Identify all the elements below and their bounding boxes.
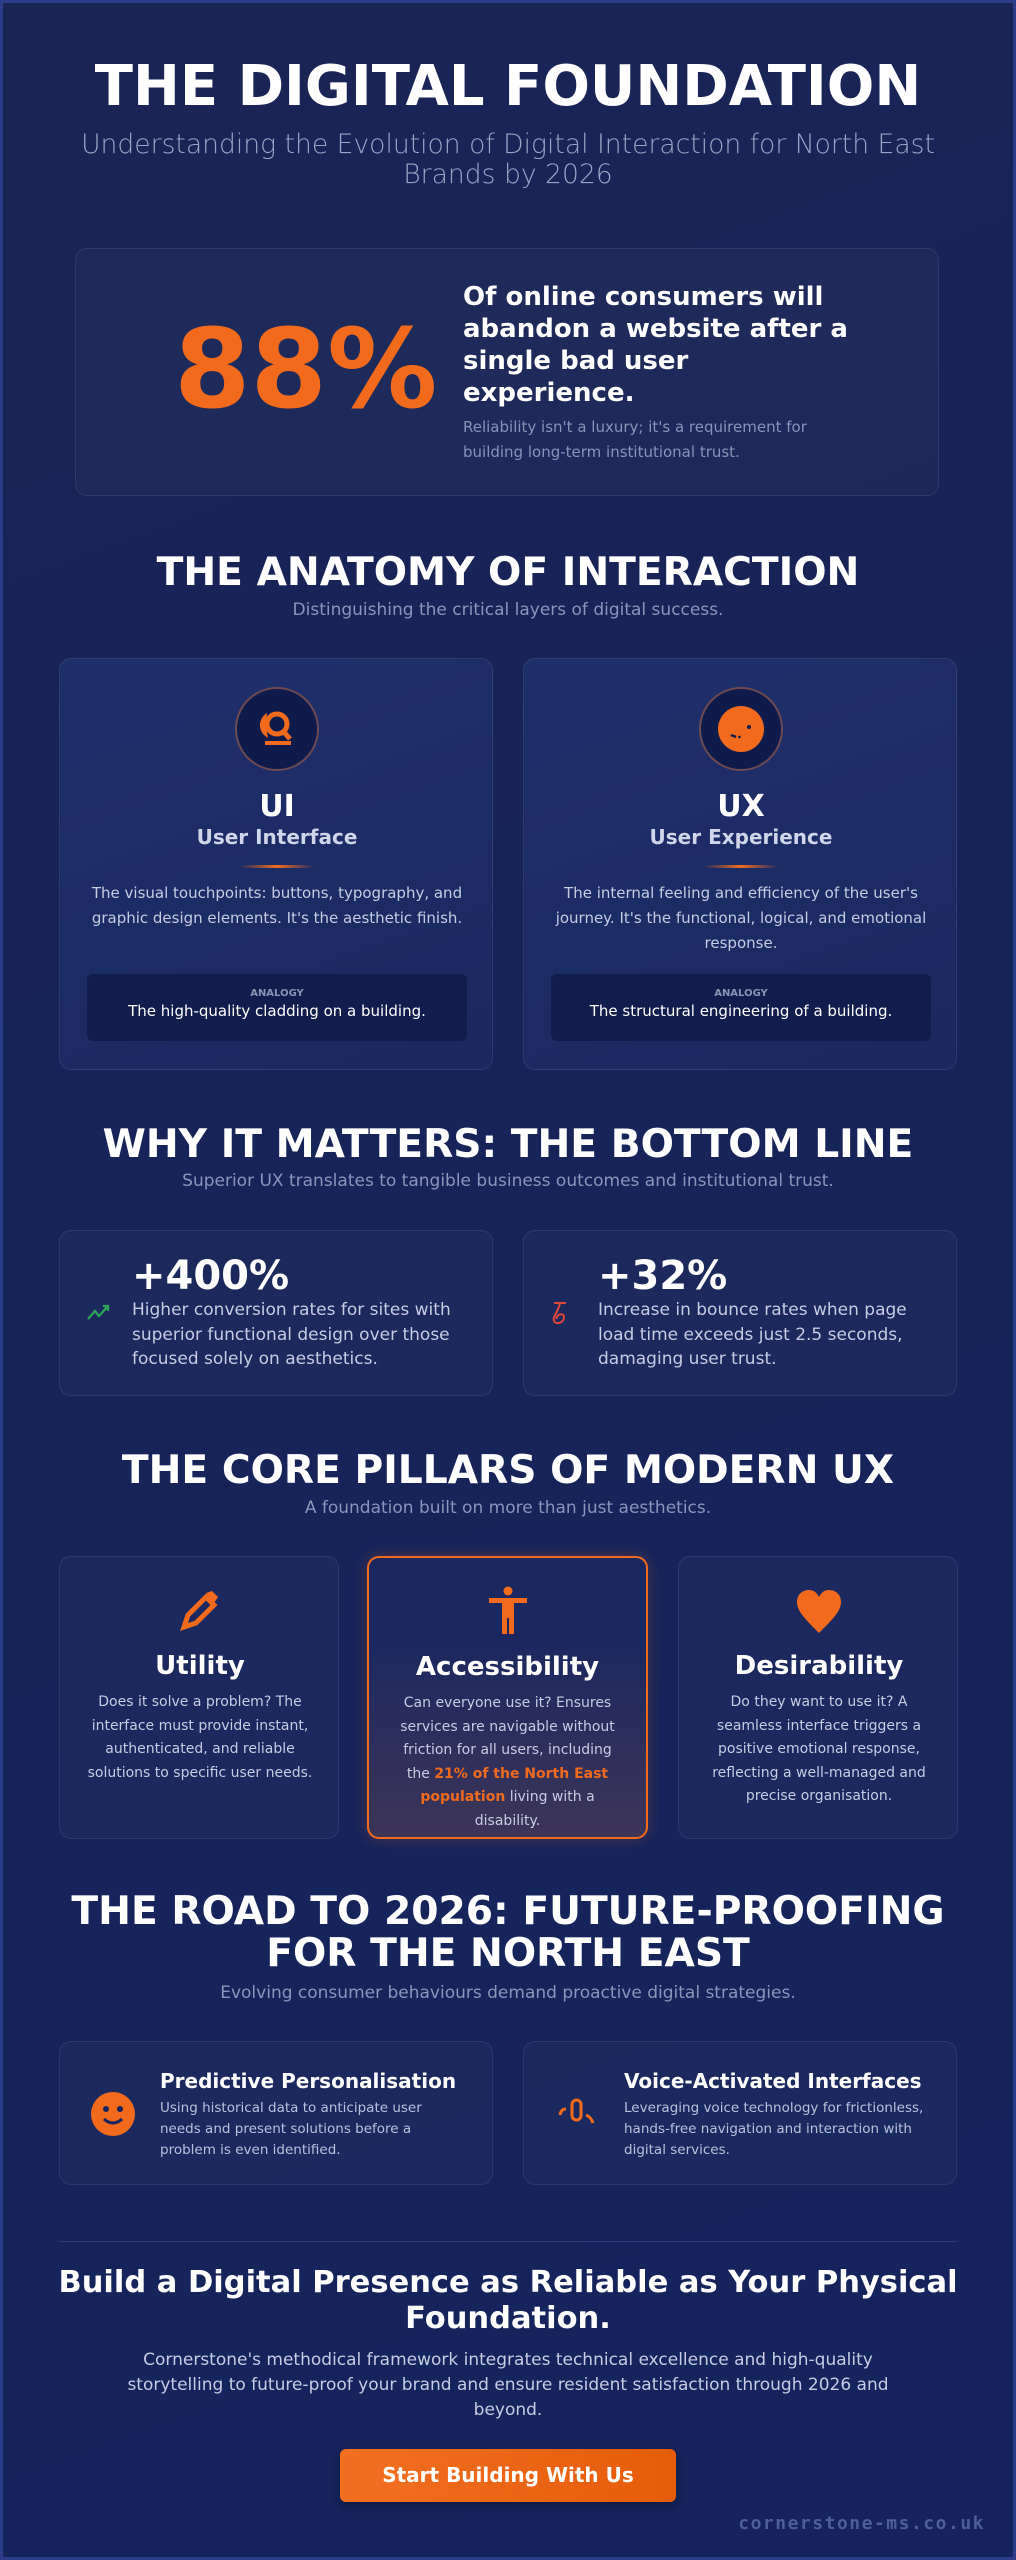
subheading: why it matters: Superior UX translates to tangible business outcomes and institutional trust.	[182, 1171, 834, 1191]
heading: road to 2026: THE ROAD TO 2026: FUTURE-PROOFING	[71, 1889, 945, 1934]
icon: trend up	[87, 1304, 110, 1320]
icon: bounce	[552, 1302, 566, 1324]
icon: accessibility	[489, 1586, 527, 1634]
pillar: accessibility (highlighted)	[367, 1556, 648, 1839]
heading: anatomy: THE ANATOMY OF INTERACTION	[157, 550, 859, 595]
CTA paragraph: Cornerstone's methodical framework integrates technical excellence and high-quality storytelling to future-proof your brand and ensure resident satisfaction through 2026 and beyond.	[127, 2350, 889, 2420]
text: Does it solve a problem? The interface must provide instant, authenticated, and reliable solutions to specific user needs.	[88, 1694, 312, 1780]
UX analogy: ANALOGY	[714, 988, 768, 999]
panel: UI	[59, 658, 493, 1070]
UX analogy: The structural engineering of a building.	[590, 1002, 892, 1020]
icon: voice	[558, 2098, 594, 2124]
UX description: The internal feeling and efficiency of the user's journey. It's the functional, logical, and emotional response.	[556, 884, 926, 952]
text: Leveraging voice technology for frictionless, hands-free navigation and interaction with digital services.	[624, 2100, 923, 2158]
pillar: utility	[59, 1556, 339, 1839]
text: Do they want to use it? A seamless interface triggers a positive emotional response, reflecting a well-managed and precise organisation.	[712, 1694, 926, 1804]
title: Predictive Personalisation	[160, 2069, 456, 2093]
CTA button: Start Building With Us	[382, 2463, 634, 2487]
subheading: core pillars: A foundation built on more than just aesthetics.	[305, 1498, 711, 1518]
subtitle: Understanding the Evolution of Digital Interaction for North East Brands by 2026	[81, 129, 935, 190]
future card: voice	[523, 2041, 957, 2185]
stat statement: Of online consumers will abandon a website after a single bad user experience.	[463, 282, 848, 408]
big stat: 88%	[174, 305, 437, 433]
stat card: +400%	[59, 1230, 493, 1396]
panel: UX	[523, 658, 957, 1070]
icon: smiley	[91, 2092, 135, 2136]
future card: predictive	[59, 2041, 493, 2185]
pillar: desirability	[678, 1556, 958, 1839]
UX title: UX	[717, 789, 765, 824]
text: Can everyone use it? Ensures services are navigable without friction for all users, including the 21% of the North East population living with a disability.	[400, 1695, 615, 1828]
stat text: Increase in bounce rates when page load time exceeds just 2.5 seconds, damaging user trust.	[598, 1300, 907, 1369]
stat panel: 88%	[75, 248, 939, 496]
icon: UI design	[235, 687, 319, 771]
CTA button	[340, 2449, 676, 2502]
heading: why it matters: WHY IT MATTERS: THE BOTTOM LINE	[103, 1122, 913, 1167]
icon: UX face	[699, 687, 783, 771]
UI analogy	[87, 974, 467, 1041]
heading: core pillars: THE CORE PILLARS OF MODERN UX	[122, 1448, 894, 1493]
stat text: Higher conversion rates for sites with superior functional design over those focused solely on aesthetics.	[132, 1300, 451, 1369]
text: Using historical data to anticipate user needs and present solutions before a problem is even identified.	[160, 2100, 422, 2158]
UI analogy: The high-quality cladding on a building.	[128, 1002, 426, 1020]
UI subtitle: User Interface	[197, 825, 357, 849]
stat value: +32%	[598, 1253, 727, 1299]
heading: road to 2026	[71, 1889, 945, 1976]
UI title: UI	[259, 789, 295, 824]
subheading: anatomy: Distinguishing the critical layers of digital success.	[293, 600, 723, 620]
icon: pencil	[180, 1591, 218, 1631]
CTA heading: Build a Digital Presence as Reliable as Your Physical Foundation.	[58, 2265, 958, 2336]
stat value: +400%	[132, 1253, 289, 1299]
title: Desirability	[735, 1651, 903, 1681]
title: Voice-Activated Interfaces	[624, 2069, 922, 2093]
stat card: +32%	[523, 1230, 957, 1396]
UI description: The visual touchpoints: buttons, typography, and graphic design elements. It's the aesthetic finish.	[92, 884, 462, 927]
subheading: road to 2026: Evolving consumer behaviours demand proactive digital strategies.	[220, 1983, 796, 2003]
title: Utility	[155, 1651, 245, 1681]
UX analogy	[551, 974, 931, 1041]
stat note: Reliability isn't a luxury; it's a requirement for building long-term institutional trust.	[463, 418, 807, 461]
UX subtitle: User Experience	[650, 825, 832, 849]
icon: heart	[797, 1590, 841, 1633]
heading: road to 2026: FOR THE NORTH EAST	[266, 1931, 750, 1976]
footer url: cornerstone-ms.co.uk	[738, 2513, 985, 2534]
title: Accessibility	[416, 1652, 599, 1682]
title: THE DIGITAL FOUNDATION	[95, 54, 921, 119]
UI analogy: ANALOGY	[250, 988, 304, 999]
